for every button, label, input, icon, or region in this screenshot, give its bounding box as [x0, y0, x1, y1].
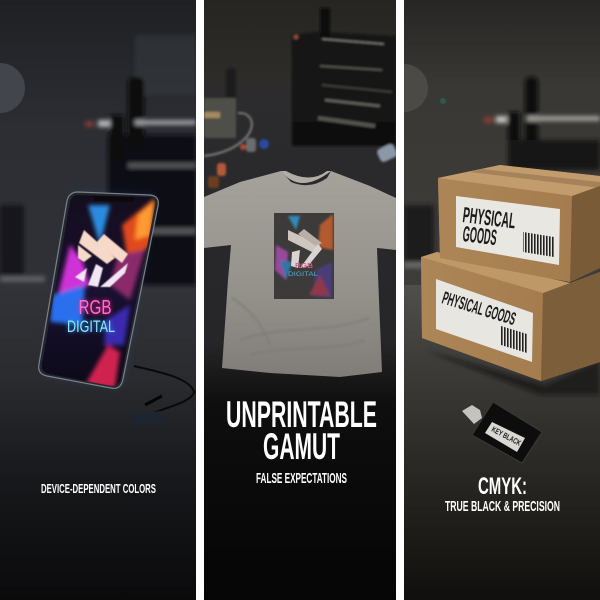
- ink bottle: [462, 402, 542, 463]
- cable and plug: [129, 366, 194, 424]
- shirt print: DIGITAL: [288, 271, 318, 278]
- upper box: [438, 165, 600, 282]
- t-shirt folds: [232, 298, 367, 334]
- heading: CMYK: CMYK:: [478, 473, 527, 500]
- phone text: RGB DIGITAL: DIGITAL: [67, 317, 115, 336]
- phone: [35, 190, 160, 390]
- heading: unprintable gamut: [227, 401, 376, 460]
- box shadow: [438, 354, 600, 396]
- upper box label: [456, 196, 560, 265]
- background machine and tools: [204, 8, 398, 188]
- shirt print text: RGB: [295, 263, 313, 270]
- caption: false expectations: FALSE EXPECTATIONS: [256, 470, 347, 487]
- phone text: RGB DIGITAL: RGB: [78, 297, 112, 319]
- shirt print: [274, 213, 334, 299]
- background machine: [404, 64, 600, 270]
- ink bottle: KEY BLACK: [490, 425, 523, 448]
- panel: unprintable gamut: [204, 0, 398, 600]
- phone glow: [44, 195, 153, 385]
- phone screen artwork: [42, 195, 156, 386]
- t-shirt collar: [281, 171, 331, 183]
- phone text: RGB DIGITAL: [67, 297, 115, 336]
- background bokeh and machine: [0, 35, 196, 285]
- lower box: [421, 252, 600, 381]
- logo chevrons: [75, 230, 128, 287]
- upper box label: PHYSICAL: [461, 202, 517, 233]
- t-shirt: [204, 171, 396, 377]
- panel: RGB digital: [0, 0, 196, 600]
- heading: unprintable gamut: UNPRINTABLE: [226, 394, 377, 435]
- lower box label: PHYSICAL GOODS: [440, 288, 518, 329]
- heading: unprintable gamut: GAMUT: [263, 426, 340, 467]
- caption: device-dependent colors: DEVICE-DEPENDENT COLORS: [41, 481, 156, 496]
- phone notch: [93, 196, 135, 202]
- panel: CMYK physical goods: [404, 0, 600, 600]
- lower box label: [436, 279, 533, 362]
- upper box label: GOODS: [461, 221, 498, 250]
